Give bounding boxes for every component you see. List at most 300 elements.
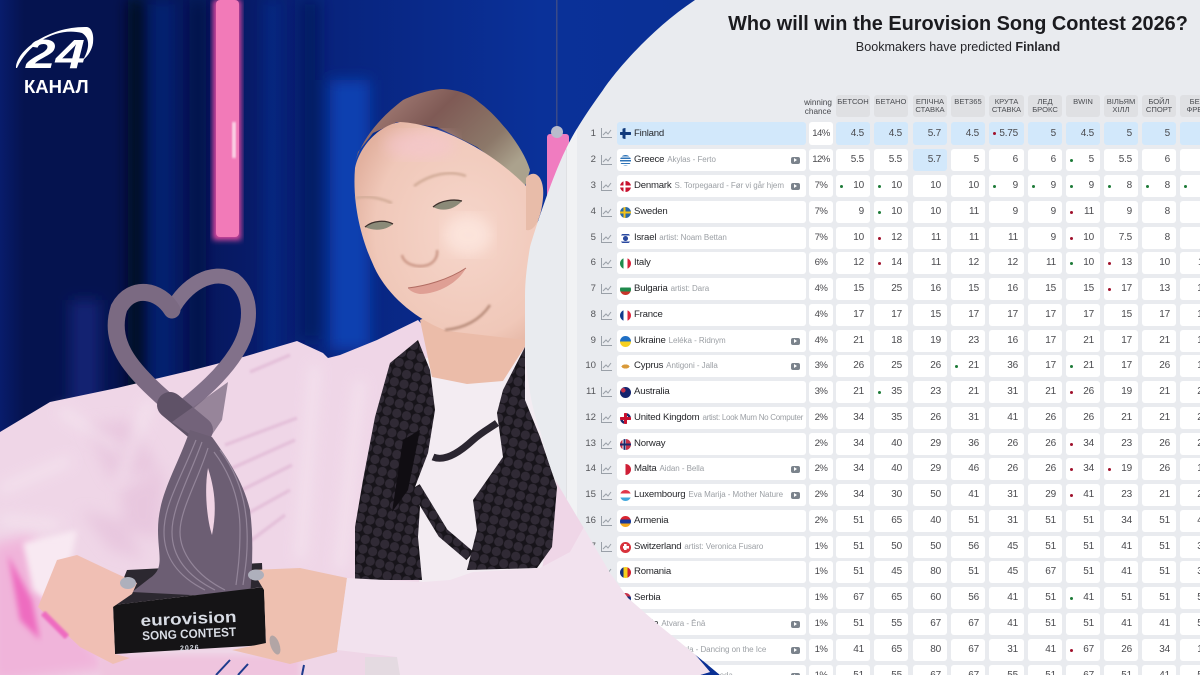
row: Finland <box>591 122 1200 145</box>
header: William Hill: ХІЛЛ <box>1112 105 1130 114</box>
row: Israel: Israel artist: Noam Bettan <box>634 232 727 243</box>
nose shadow <box>402 250 437 266</box>
row: Latvia: 41 <box>1121 618 1132 629</box>
row: Armenia: 31 <box>1007 515 1018 526</box>
row: Romania: 45 <box>891 566 902 577</box>
row: Sweden: 9 <box>1127 206 1132 217</box>
row: United Kingdom: 26 <box>1045 412 1056 423</box>
hair <box>355 89 530 190</box>
row: Serbia: 1% <box>815 592 827 603</box>
row: Belgium: 65 <box>891 644 902 655</box>
row: United Kingdom: 31 <box>968 412 979 423</box>
row: Armenia: 65 <box>891 515 902 526</box>
row: Cyprus: 17 <box>1045 360 1056 371</box>
row: Luxembourg: 2% <box>815 489 827 500</box>
row: Finland: Finland <box>634 128 664 139</box>
row: Norway: 34 <box>1083 438 1094 449</box>
row: Norway: 26 <box>1045 438 1056 449</box>
row: Romania: 51 <box>1159 566 1170 577</box>
row: Luxembourg: 31 <box>1007 489 1018 500</box>
row: Finland: 5.7 <box>928 128 941 139</box>
row: France: 17 <box>1007 309 1018 320</box>
row: Australia: 19 <box>1121 386 1132 397</box>
row: Romania: 45 <box>1007 566 1018 577</box>
row: Croatia <box>708 665 1200 675</box>
row: Ukraine: 21 <box>1159 335 1170 346</box>
row: Belgium: 21 <box>585 644 596 655</box>
row: Greece: 5 <box>1089 154 1094 165</box>
row: Romania: 51 <box>1083 566 1094 577</box>
pink light tube left <box>213 0 241 240</box>
row: Belgium: 41 <box>1045 644 1056 655</box>
row: United Kingdom: 12 <box>585 412 596 423</box>
row: France: 4% <box>815 309 827 320</box>
row: France: 17 <box>891 309 902 320</box>
row: Denmark: 8 <box>1127 180 1132 191</box>
row: Greece: 12% <box>812 154 830 165</box>
row: Malta: Malta Aidan - Bella <box>634 463 704 474</box>
header: winning chance: winning chance <box>804 98 832 116</box>
row: Israel: 10 <box>853 232 864 243</box>
row: Sweden: 10 <box>891 206 902 217</box>
row: France: 17 <box>1159 309 1170 320</box>
row: Finland: 5 <box>1165 128 1170 139</box>
row: United Kingdom: 21 <box>1121 412 1132 423</box>
row: Latvia: 51 <box>1045 618 1056 629</box>
row: Armenia: 2% <box>815 515 827 526</box>
row: France: 17 <box>968 309 979 320</box>
row: Serbia: 51 <box>1045 592 1056 603</box>
row: Armenia: Armenia <box>634 515 668 526</box>
row: Luxembourg <box>586 484 1200 506</box>
row: Luxembourg: 21 <box>1159 489 1170 500</box>
row: Serbia <box>620 587 1200 609</box>
row: Australia: 26 <box>1083 386 1094 397</box>
row: Norway: 29 <box>930 438 941 449</box>
row: Malta <box>586 458 1200 480</box>
nail right <box>248 570 264 580</box>
row: Romania: 41 <box>1121 566 1132 577</box>
row: Denmark: 7% <box>815 180 827 191</box>
row: Latvia: 67 <box>930 618 941 629</box>
row: Italy: 14 <box>891 257 902 268</box>
row: Israel: 9 <box>1051 232 1056 243</box>
row: Australia: 3% <box>815 386 827 397</box>
row: Belgium: Belgium Essyla - Dancing on the Ice <box>634 644 766 655</box>
row: Bulgaria <box>591 278 1200 300</box>
row: Luxembourg: 30 <box>891 489 902 500</box>
row: Serbia: 51 <box>1159 592 1170 603</box>
row: Norway <box>586 433 1200 455</box>
row: Armenia: 51 <box>853 515 864 526</box>
row: Sweden: 4 <box>591 206 596 217</box>
row: Greece: 2 <box>591 154 596 165</box>
row: Armenia: 51 <box>1045 515 1056 526</box>
row: Ukraine: 17 <box>1045 335 1056 346</box>
row: Israel: 11 <box>969 232 979 243</box>
row: Norway: 2% <box>815 438 827 449</box>
row: Latvia: Latvia Atvara - Ēnā <box>634 618 705 629</box>
row: Norway: 26 <box>1159 438 1170 449</box>
row: Israel: 11 <box>1008 232 1018 243</box>
row: Greece: Greece Akylas - Ferto <box>634 154 716 165</box>
row: Serbia: 56 <box>968 592 979 603</box>
row: Norway: 34 <box>853 438 864 449</box>
row: France: 17 <box>1083 309 1094 320</box>
row: Finland: 4.5 <box>966 128 979 139</box>
nail left <box>120 577 136 589</box>
row: Cyprus: 25 <box>891 360 902 371</box>
row: Malta: 26 <box>1045 463 1056 474</box>
row: Sweden: 11 <box>969 206 979 217</box>
row: Ukraine <box>591 330 1200 352</box>
row: Italy: Italy <box>634 257 651 268</box>
row: Australia: 11 <box>586 386 596 397</box>
row: Malta: 29 <box>930 463 941 474</box>
row: Australia: 21 <box>1045 386 1056 397</box>
header: Ladbrokes <box>1028 95 1062 117</box>
row: Latvia <box>646 613 1200 635</box>
row: Finland: 5 <box>1127 128 1132 139</box>
row: United Kingdom: 26 <box>930 412 941 423</box>
row: Switzerland: 51 <box>1045 541 1056 552</box>
row: Israel <box>591 227 1200 249</box>
row: Greece: 5 <box>974 154 979 165</box>
row: Greece: 6 <box>1013 154 1018 165</box>
row: Denmark: 9 <box>1013 180 1018 191</box>
row: Switzerland: 56 <box>968 541 979 552</box>
row: Italy: 11 <box>1046 257 1056 268</box>
row: France: 17 <box>1045 309 1056 320</box>
row: Latvia: 67 <box>968 618 979 629</box>
row: Bulgaria: 7 <box>591 283 596 294</box>
header: William Hill <box>1104 95 1138 117</box>
row: Ukraine: Ukraine Leléka - Ridnym <box>634 335 726 346</box>
row: Romania: 51 <box>968 566 979 577</box>
row: Bulgaria: 16 <box>930 283 941 294</box>
row: Serbia: 51 <box>1121 592 1132 603</box>
row: Australia <box>586 381 1200 403</box>
subtitle: Bookmakers have predicted Finland <box>856 40 1060 54</box>
header: Betano: БЕТАНО <box>876 97 906 106</box>
row: Malta: 26 <box>1007 463 1018 474</box>
row: Greece <box>591 149 1200 171</box>
row: Greece: 5.5 <box>851 154 864 165</box>
row: Italy: 6% <box>815 257 827 268</box>
row: Bulgaria: 4% <box>815 283 827 294</box>
row: Switzerland: 45 <box>1007 541 1018 552</box>
row: Armenia: 51 <box>968 515 979 526</box>
row: Luxembourg: 50 <box>930 489 941 500</box>
row: Malta: 34 <box>1083 463 1094 474</box>
row: Israel: 12 <box>891 232 902 243</box>
row: Luxembourg: 15 <box>585 489 596 500</box>
row: Switzerland: Switzerland artist: Veronica Fusaro <box>634 541 763 552</box>
ear <box>526 174 543 230</box>
row: Italy: 10 <box>1083 257 1094 268</box>
row: Switzerland: 41 <box>1121 541 1132 552</box>
jaw shadow <box>445 305 490 330</box>
row: Sweden: 8 <box>1165 206 1170 217</box>
row: Luxembourg: 41 <box>968 489 979 500</box>
row: France <box>591 304 1200 326</box>
row: Denmark: 3 <box>591 180 596 191</box>
trophy base with logo: eurovision <box>140 609 237 630</box>
row: Latvia: 20 <box>585 618 596 629</box>
white blouse <box>400 350 557 590</box>
header: Betano <box>874 95 908 117</box>
row: Belgium: 1% <box>815 644 827 655</box>
row: Ukraine: 21 <box>853 335 864 346</box>
row: Sweden: 11 <box>1084 206 1094 217</box>
row: Latvia: 51 <box>853 618 864 629</box>
cheek glow <box>444 215 492 255</box>
row: Cyprus: 21 <box>1083 360 1094 371</box>
row: Latvia: 41 <box>1159 618 1170 629</box>
row: Malta: 14 <box>585 463 596 474</box>
row: Switzerland: 51 <box>1159 541 1170 552</box>
row: Luxembourg: 41 <box>1083 489 1094 500</box>
bead necklace <box>355 340 557 580</box>
row: Israel: 11 <box>931 232 941 243</box>
row: Malta: 34 <box>853 463 864 474</box>
eyes <box>365 221 393 230</box>
logo: 24 Kanal: КАНАЛ <box>24 76 89 97</box>
row: Romania: 51 <box>853 566 864 577</box>
row: United Kingdom: 26 <box>1083 412 1094 423</box>
ring <box>267 634 283 656</box>
row: Finland: 5.75 <box>999 128 1018 139</box>
row: Greece: 5.5 <box>889 154 902 165</box>
row: Norway: 26 <box>1007 438 1018 449</box>
row: Belgium: 80 <box>930 644 941 655</box>
row: Norway: 36 <box>968 438 979 449</box>
row: Finland: 14% <box>812 128 830 139</box>
row: Bulgaria: Bulgaria artist: Dara <box>634 283 709 294</box>
header: Betfred <box>1180 95 1200 117</box>
title: Who will win the Eurovision Song Contest 2026? <box>728 13 1188 35</box>
row: Latvia: 51 <box>1083 618 1094 629</box>
row: United Kingdom: 35 <box>891 412 902 423</box>
lips <box>408 268 466 294</box>
dress and sleeves <box>0 320 710 675</box>
row: Switzerland <box>592 536 1200 558</box>
row: Armenia: 51 <box>1159 515 1170 526</box>
row: Australia: 35 <box>891 386 902 397</box>
logo: 24 Kanal: 24 <box>25 31 85 77</box>
header: Cool Bet: СТАВКА <box>992 105 1021 114</box>
row: Sweden: Sweden <box>634 206 667 217</box>
row: France: 15 <box>930 309 941 320</box>
row: Italy: 12 <box>1007 257 1018 268</box>
row: Romania <box>609 561 1200 583</box>
row: Ukraine: 19 <box>930 335 941 346</box>
header: Bwin: BWIN <box>1073 97 1093 106</box>
row: Serbia: 19 <box>585 592 596 603</box>
row: Israel: 7.5 <box>1119 232 1132 243</box>
table <box>586 95 1200 675</box>
trophy base top <box>113 563 263 605</box>
row: United Kingdom: 41 <box>1007 412 1018 423</box>
row: Armenia: 51 <box>1083 515 1094 526</box>
row: Bulgaria: 25 <box>891 283 902 294</box>
row: Norway: 40 <box>891 438 902 449</box>
row: Malta: 40 <box>891 463 902 474</box>
row: Denmark: 10 <box>891 180 902 191</box>
row: France: France <box>634 309 663 320</box>
row: Belgium: 26 <box>1121 644 1132 655</box>
row: Sweden: 10 <box>930 206 941 217</box>
row: Bulgaria: 15 <box>968 283 979 294</box>
row: Armenia <box>586 510 1200 532</box>
row: Cyprus: 10 <box>585 360 596 371</box>
row: Armenia: 40 <box>930 515 941 526</box>
row: Greece: 6 <box>1165 154 1170 165</box>
trophy base with logo: SONG CONTEST <box>142 625 237 643</box>
right hand <box>232 568 347 664</box>
row: Israel: 8 <box>1165 232 1170 243</box>
row: Serbia: 41 <box>1007 592 1018 603</box>
row: France: 17 <box>853 309 864 320</box>
row: Serbia: 60 <box>930 592 941 603</box>
row: Romania: 80 <box>930 566 941 577</box>
row: Bulgaria: 13 <box>1159 283 1170 294</box>
row: Cyprus: 21 <box>968 360 979 371</box>
row: Armenia: 34 <box>1121 515 1132 526</box>
row: Italy: 6 <box>591 257 596 268</box>
row: Luxembourg: 23 <box>1121 489 1132 500</box>
row: Sweden: 9 <box>1013 206 1018 217</box>
row: United Kingdom: 34 <box>853 412 864 423</box>
header: Cool Bet <box>989 95 1024 117</box>
row: Switzerland: 1% <box>815 541 827 552</box>
row: Malta: 46 <box>968 463 979 474</box>
row: Latvia: 1% <box>815 618 827 629</box>
row: Greece: 6 <box>1051 154 1056 165</box>
row: Switzerland: 51 <box>853 541 864 552</box>
row: Italy: 13 <box>1121 257 1132 268</box>
trophy base with logo: 2026 <box>180 645 200 652</box>
row: Norway: Norway <box>634 438 665 449</box>
row: Romania: 18 <box>585 566 596 577</box>
row: Bulgaria: 17 <box>1121 283 1132 294</box>
row: Luxembourg: Luxembourg Eva Marija - Mother Nature <box>634 489 783 500</box>
header: Bet365 <box>951 95 985 117</box>
trophy base with logo <box>113 587 266 654</box>
row: United Kingdom: 2% <box>815 412 827 423</box>
row: Australia: 21 <box>853 386 864 397</box>
row: Malta: 2% <box>815 463 827 474</box>
row: Ukraine: 21 <box>1083 335 1094 346</box>
row: United Kingdom: 21 <box>1159 412 1170 423</box>
row: Malta: 19 <box>1121 463 1132 474</box>
row: Serbia: 67 <box>853 592 864 603</box>
row: Italy: 11 <box>931 257 941 268</box>
row: Belgium: 67 <box>968 644 979 655</box>
row: Ukraine: 18 <box>891 335 902 346</box>
row: Luxembourg: 29 <box>1045 489 1056 500</box>
header: Ladbrokes: БРОКС <box>1032 105 1058 114</box>
row: Bulgaria: 16 <box>1007 283 1018 294</box>
header: William Hill: ВІЛЬЯМ <box>1107 97 1135 106</box>
row: Ukraine: 9 <box>591 335 596 346</box>
row: Australia: 23 <box>930 386 941 397</box>
row: Malta: 26 <box>1159 463 1170 474</box>
row: Greece: 5.7 <box>928 154 941 165</box>
header: Betsson: БЕТСОН <box>837 97 869 106</box>
header: Cool Bet: КРУТА <box>995 97 1018 106</box>
row: Denmark: 8 <box>1165 180 1170 191</box>
row: Denmark: 9 <box>1051 180 1056 191</box>
hot pink reflection on hand <box>43 613 67 637</box>
header: Epic Bet: ЕПІЧНА <box>916 97 944 106</box>
row: Finland: 5 <box>1051 128 1056 139</box>
row: Belgium: 67 <box>1083 644 1094 655</box>
row: Cyprus <box>586 355 1200 377</box>
row: Latvia: 55 <box>891 618 902 629</box>
row: Sweden: 7% <box>815 206 827 217</box>
trophy sculpture <box>116 276 252 598</box>
row: Latvia: 41 <box>1007 618 1018 629</box>
forehead tint <box>385 131 455 159</box>
row: Israel: 10 <box>1083 232 1094 243</box>
row: Finland: 4.5 <box>889 128 902 139</box>
panel: odds table <box>525 0 1200 675</box>
row: Finland: 4.5 <box>851 128 864 139</box>
row: Italy: 10 <box>1159 257 1170 268</box>
header: Boyle Sports: БОЙЛ <box>1148 97 1170 106</box>
row: Ukraine: 16 <box>1007 335 1018 346</box>
left hand <box>38 555 137 664</box>
row: Cyprus: 26 <box>853 360 864 371</box>
row: Denmark: 10 <box>853 180 864 191</box>
row: Romania: 1% <box>815 566 827 577</box>
row: Romania: Romania <box>634 566 671 577</box>
row: Cyprus: 3% <box>815 360 827 371</box>
row: Denmark: 10 <box>930 180 941 191</box>
row: Serbia: 65 <box>891 592 902 603</box>
row: Switzerland: 51 <box>1083 541 1094 552</box>
row: Sweden: 9 <box>859 206 864 217</box>
row: Bulgaria: 15 <box>853 283 864 294</box>
header: Bwin <box>1066 95 1100 117</box>
neck <box>420 270 526 384</box>
row: Belgium <box>676 639 1200 661</box>
pink light tube right <box>547 0 569 224</box>
row: Bulgaria: 15 <box>1083 283 1094 294</box>
row: Denmark: 9 <box>1089 180 1094 191</box>
row: Cyprus: 36 <box>1007 360 1018 371</box>
header: Ladbrokes: ЛЕД <box>1037 97 1053 106</box>
row: Denmark: 10 <box>968 180 979 191</box>
row: Australia: Australia <box>634 386 670 397</box>
face <box>354 122 543 340</box>
row: Israel: 5 <box>591 232 596 243</box>
row: Norway: 13 <box>585 438 596 449</box>
row: Cyprus: 26 <box>1159 360 1170 371</box>
right sleeve <box>337 525 710 675</box>
row: Australia: 21 <box>1159 386 1170 397</box>
row: United Kingdom: United Kingdom artist: Look Mum No Computer <box>634 412 803 423</box>
header: Boyle Sports: СПОРТ <box>1146 105 1172 114</box>
header: Bet365: BET365 <box>954 97 982 106</box>
row: Ukraine: 17 <box>1121 335 1132 346</box>
row: Cyprus: 17 <box>1121 360 1132 371</box>
row: Sweden: 9 <box>1051 206 1056 217</box>
row: Australia: 31 <box>1007 386 1018 397</box>
row: Belgium: 31 <box>1007 644 1018 655</box>
row: Sweden <box>590 201 1200 223</box>
